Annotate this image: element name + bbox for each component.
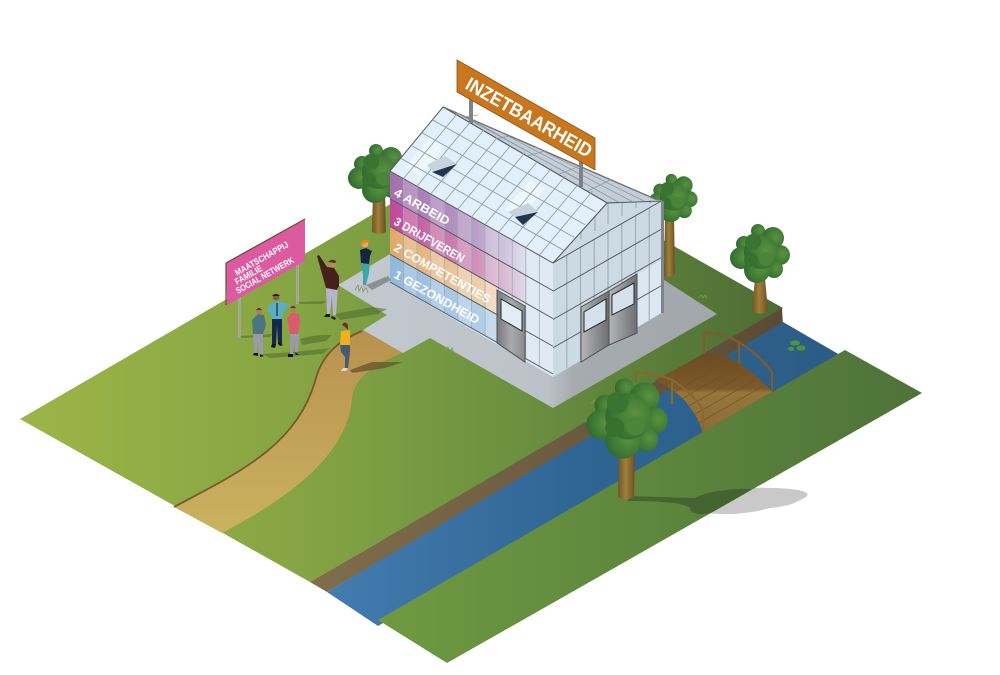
gable outline	[553, 201, 663, 263]
person navy teal phone	[360, 240, 372, 288]
ground: main lawn	[20, 144, 783, 582]
wall grid	[404, 179, 539, 366]
band 1 gezondheid	[390, 254, 498, 343]
person yellow top	[340, 322, 350, 371]
canal water	[327, 322, 840, 626]
right gable wall	[553, 200, 663, 377]
right facade double doors	[581, 274, 637, 362]
band labels: 3 DRIJFVEREN	[392, 214, 467, 266]
greenhouse	[390, 98, 664, 377]
pink board: MAATSCHAPPIJ	[233, 239, 290, 278]
grass tufts	[355, 285, 707, 404]
people shadows	[240, 301, 387, 358]
lily pads	[788, 340, 806, 351]
back roof	[443, 107, 662, 203]
right wall lower light panes	[636, 259, 663, 328]
footpath	[174, 330, 405, 533]
back roof grid	[457, 113, 648, 203]
walker shadow on path	[350, 362, 403, 373]
bridge	[636, 332, 772, 432]
corner post	[661, 201, 664, 313]
paved terrace	[338, 254, 717, 408]
sign: inzetbaarheid: INZETBAARHEID	[462, 74, 595, 162]
tree shadow on white background	[690, 488, 808, 514]
bridge deck	[655, 354, 772, 432]
glass roof	[390, 107, 607, 263]
near bank	[378, 350, 922, 663]
band labels: 2 COMPETENTIES	[392, 240, 493, 306]
coloured bands	[390, 171, 553, 374]
roof highlights	[405, 137, 545, 219]
tree right of house	[730, 224, 790, 314]
pink board: SOCIAL NETWERK	[234, 255, 296, 296]
front tree	[586, 378, 668, 500]
band labels	[392, 185, 493, 327]
left glass wall	[390, 171, 553, 377]
pink board: FAMILIE	[233, 263, 264, 287]
roof hatch right	[508, 203, 538, 225]
band 2 competenties	[390, 226, 498, 315]
phone user shadow	[366, 276, 391, 290]
band 3 drijfveren	[390, 199, 527, 304]
person red shirt	[287, 306, 300, 357]
person waving	[317, 255, 339, 320]
person teal shirt navy trousers	[268, 294, 290, 348]
bridge planks	[664, 355, 765, 423]
bridge rear rail	[704, 332, 772, 392]
sign posts	[469, 98, 583, 187]
tree behind greenhouse left	[348, 144, 408, 234]
canal bank	[310, 308, 783, 592]
band 4 arbeid	[390, 171, 527, 276]
sign posts pink board	[238, 262, 299, 338]
pink board	[226, 219, 305, 305]
tree behind greenhouse right	[648, 174, 698, 277]
right wall grid	[567, 208, 649, 368]
gable mullions	[567, 200, 650, 247]
band labels: 4 ARBEID	[392, 185, 453, 228]
bridge front rail	[636, 372, 703, 432]
roof grid	[390, 107, 606, 263]
band labels: 1 GEZONDHEID	[392, 267, 482, 327]
footpath edge	[174, 331, 362, 507]
person grey-teal shirt	[252, 308, 266, 357]
roof hatch left	[427, 156, 457, 177]
left facade door	[497, 290, 525, 362]
band glass stripes	[404, 179, 499, 343]
tree shadow on grass	[628, 489, 752, 514]
